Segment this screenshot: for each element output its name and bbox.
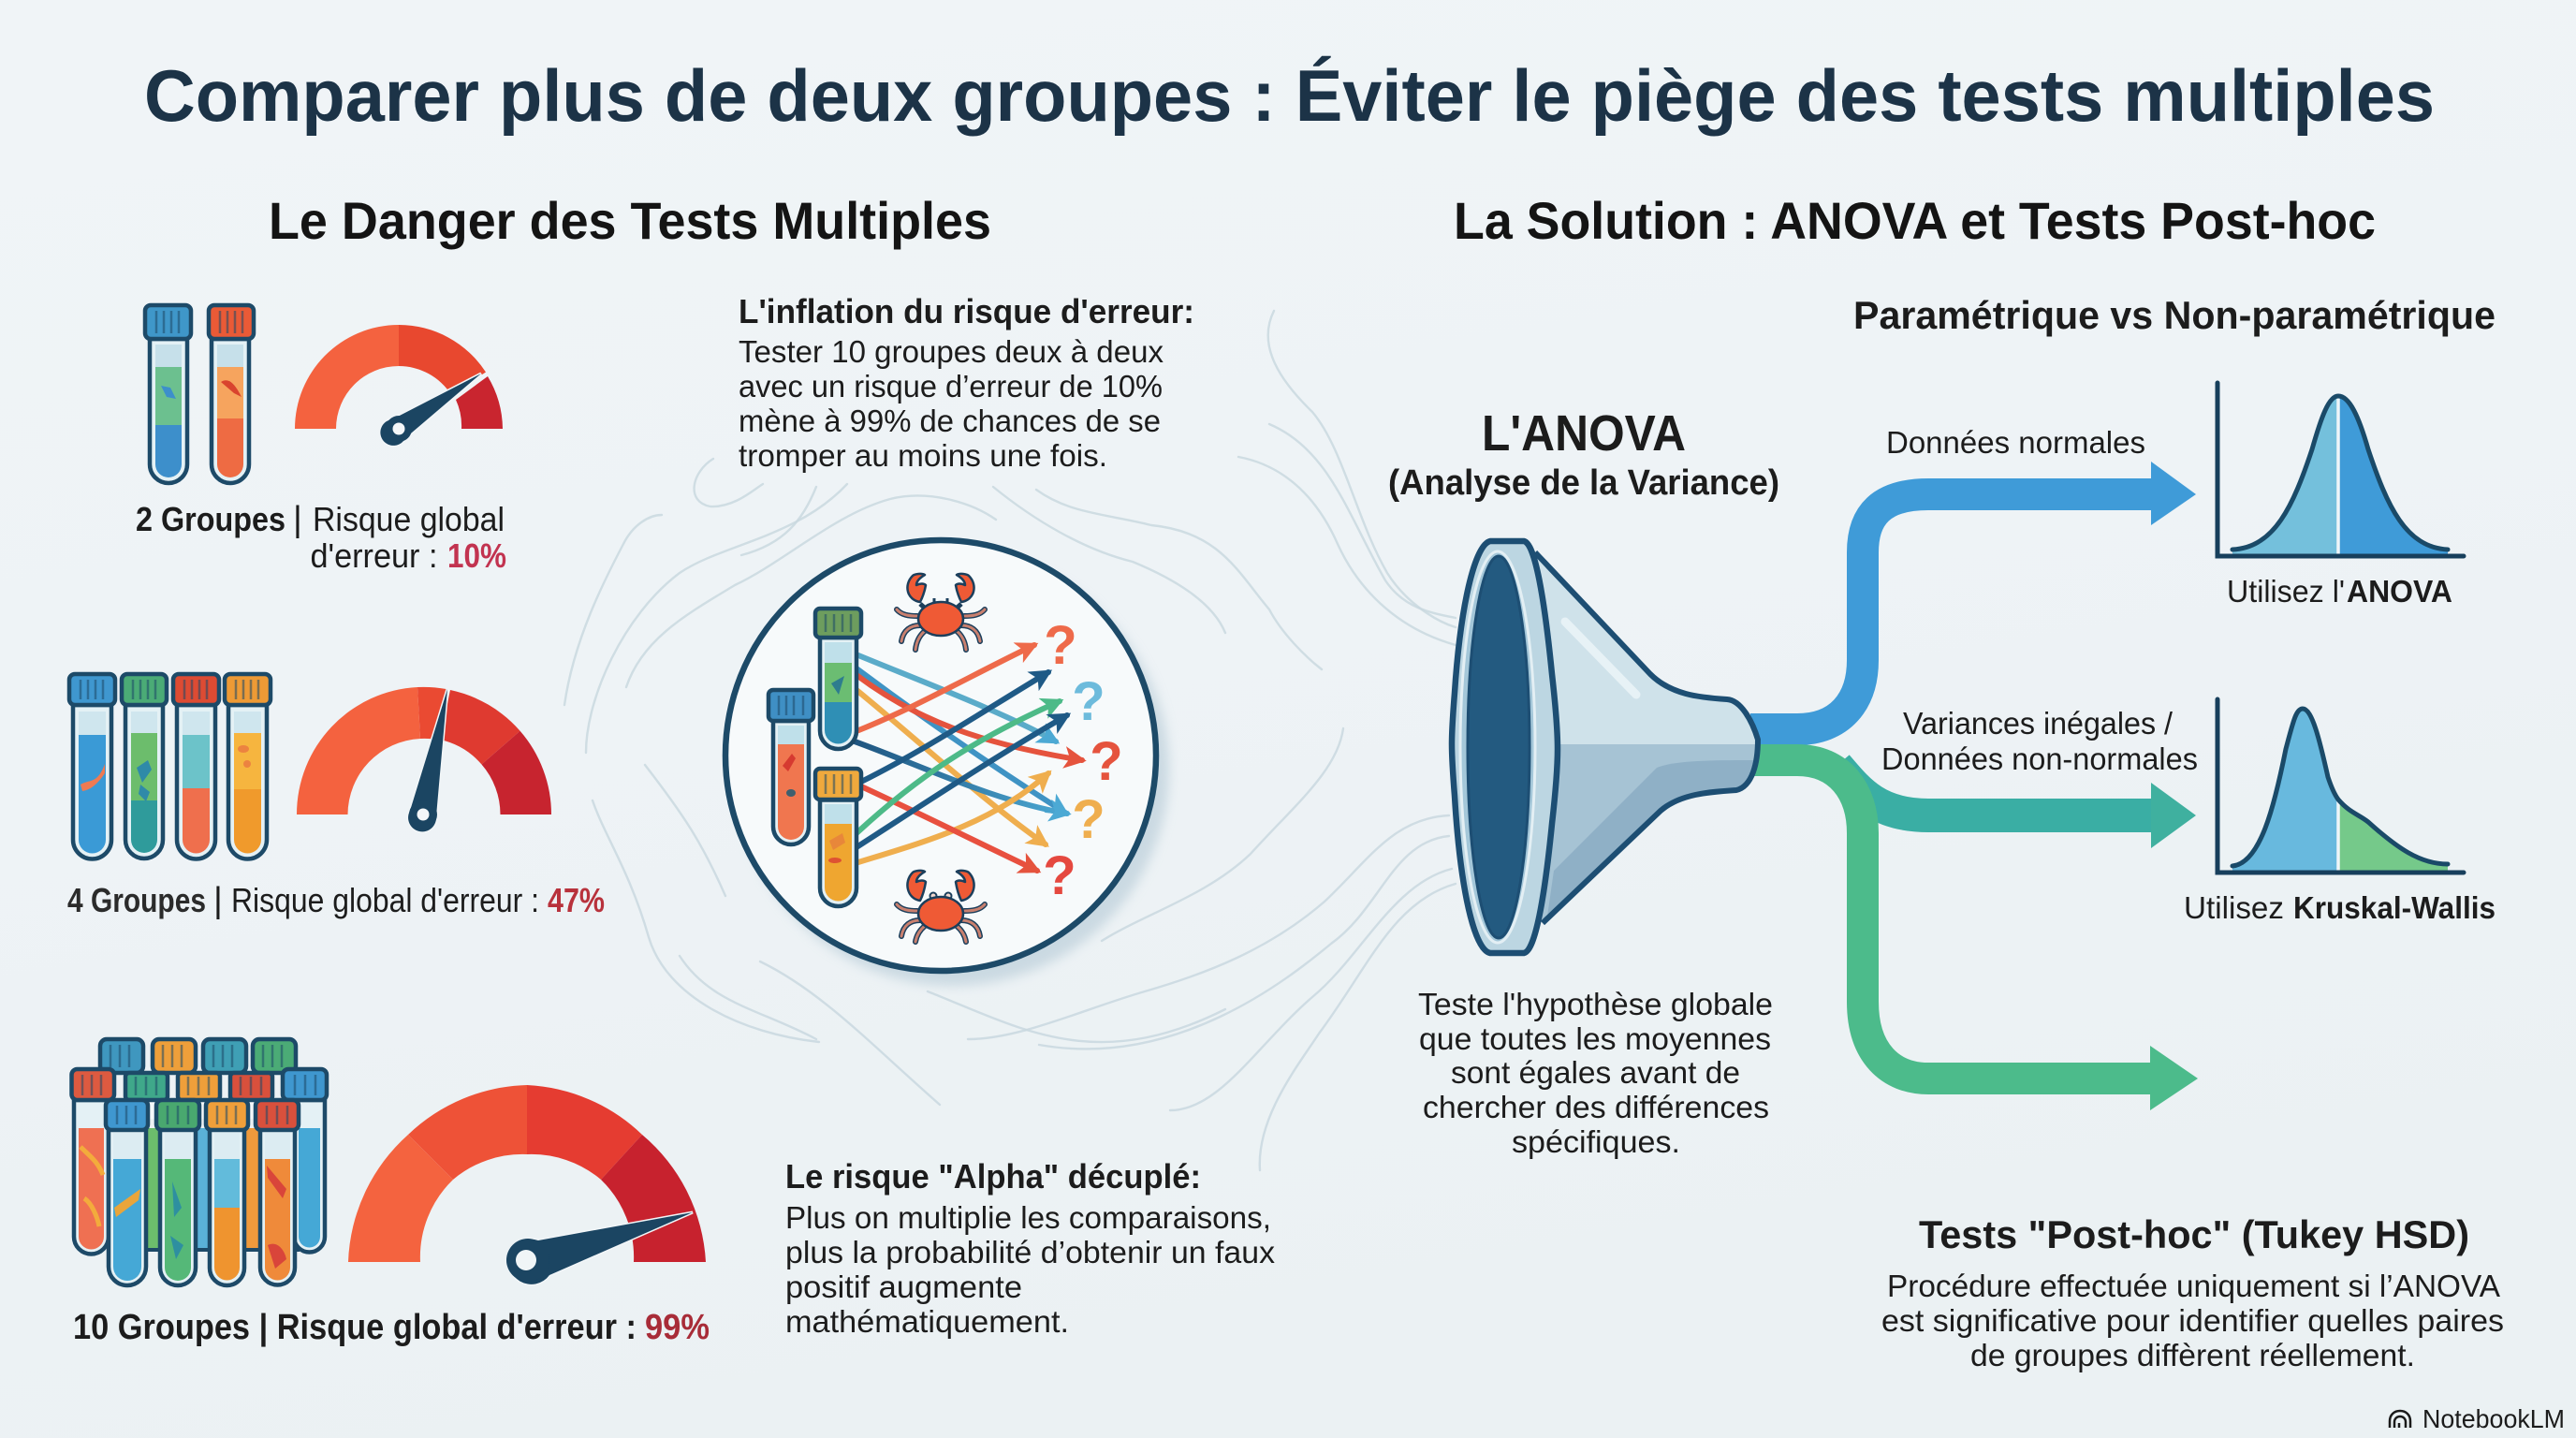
label: 4 groupes xyxy=(67,881,605,920)
heading: solution: La Solution : ANOVA et Tests Post-hoc xyxy=(1454,191,2376,250)
text block: risque alpha xyxy=(785,1157,1275,1339)
label: utilisez ANOVA: ANOVA xyxy=(2347,574,2452,609)
text block: risque alpha: plus la probabilité d’obtenir un faux xyxy=(785,1235,1275,1269)
text block: risque alpha: positif augmente xyxy=(785,1269,1022,1304)
icons: question marks: ? xyxy=(1044,615,1077,676)
icon: funnel xyxy=(1452,541,1769,953)
title: Comparer plus de deux groupes : Éviter le piège des tests multiples xyxy=(144,54,2435,137)
text block: inflation du risque: tromper au moins une fois. xyxy=(739,438,1107,473)
chart: skewed distribution xyxy=(2217,699,2464,873)
heading: ANOVA xyxy=(1388,405,1779,503)
gauge: 47% xyxy=(297,687,551,831)
text block: hypothèse globale: sont égales avant de xyxy=(1451,1055,1740,1090)
label: données normales: Données normales xyxy=(1886,425,2145,460)
text block: inflation du risque: mène à 99% de chances de se xyxy=(739,404,1161,438)
panel: 10 groupes xyxy=(71,1039,710,1347)
circle shadow xyxy=(737,553,1169,986)
label: variances inégales: Variances inégales / xyxy=(1903,706,2174,741)
chart: normal distribution xyxy=(2217,383,2464,556)
swirling background lines xyxy=(564,311,1456,1170)
heading: ANOVA: L'ANOVA xyxy=(1482,405,1686,462)
text block: tests post-hoc xyxy=(1881,1212,2504,1372)
icons: question marks: ? xyxy=(1090,731,1123,792)
text block: tests post-hoc: Procédure effectuée uniquement si l’ANOVA xyxy=(1887,1269,2500,1303)
test tube: blue cap xyxy=(768,690,813,844)
gauge: 99% xyxy=(348,1085,706,1284)
icons: question marks: ? xyxy=(1072,789,1105,850)
gauge: 10% xyxy=(295,325,503,446)
label: 10 groupes: 99% xyxy=(645,1308,710,1347)
text block: risque alpha: Le risque "Alpha" décuplé: xyxy=(785,1157,1201,1196)
label: 4 groupes: | xyxy=(213,881,223,920)
label: variances inégales xyxy=(1881,706,2198,776)
label: 2 groupes: Risque global xyxy=(313,500,505,538)
text block: inflation du risque: Tester 10 groupes deux à deux xyxy=(739,334,1164,369)
label: utilisez ANOVA: Utilisez l' xyxy=(2227,574,2345,609)
text block: inflation du risque: avec un risque d’erreur de 10% xyxy=(739,369,1163,404)
arrows: comparisons xyxy=(855,645,1082,871)
crab: top xyxy=(897,574,985,650)
text block: hypothèse globale: chercher des différences xyxy=(1423,1090,1769,1124)
icons: question marks: ? xyxy=(1043,845,1076,906)
text block: tests post-hoc: est significative pour identifier quelles paires xyxy=(1881,1303,2504,1338)
heading: paramétrique vs non-paramétrique: Paramétrique vs Non-paramétrique xyxy=(1853,293,2496,337)
text block: tests post-hoc: Tests "Post-hoc" (Tukey HSD) xyxy=(1919,1212,2469,1256)
label: utilisez kruskal-wallis: Kruskal-Wallis xyxy=(2293,890,2496,925)
arrow: blue branch xyxy=(1750,462,2196,729)
label: 4 groupes: Risque global d'erreur : xyxy=(231,881,539,919)
text block: inflation du risque xyxy=(739,292,1194,473)
text block: tests post-hoc: de groupes diffèrent réellement. xyxy=(1970,1338,2415,1372)
text block: hypothèse globale: spécifiques. xyxy=(1512,1124,1680,1159)
test tube: green cap xyxy=(815,609,861,749)
crab: bottom xyxy=(897,871,985,942)
label: 2 groupes xyxy=(136,500,506,575)
illustration: pairwise comparison circle xyxy=(725,540,1169,986)
label: 2 groupes: d'erreur : xyxy=(311,536,438,575)
label: 4 groupes: 47% xyxy=(548,881,605,919)
text block: hypothèse globale xyxy=(1418,987,1773,1159)
text block: hypothèse globale: que toutes les moyennes xyxy=(1419,1021,1771,1056)
heading: danger: Le Danger des Tests Multiples xyxy=(269,191,991,250)
label: 2 groupes: 2 Groupes xyxy=(136,500,285,538)
icon: ten test tubes xyxy=(71,1039,327,1285)
panel: 2 groupes xyxy=(136,305,506,575)
label: utilisez kruskal-wallis xyxy=(2184,890,2496,925)
text block: hypothèse globale: Teste l'hypothèse globale xyxy=(1418,987,1773,1021)
text block: inflation du risque: L'inflation du risque d'erreur: xyxy=(739,292,1194,330)
label: 10 groupes: 10 Groupes | Risque global d'erreur : xyxy=(73,1308,637,1347)
label: utilisez ANOVA xyxy=(2227,574,2452,609)
icon: four test tubes xyxy=(69,674,271,858)
label: 2 groupes: | xyxy=(293,500,302,539)
heading: ANOVA: (Analyse de la Variance) xyxy=(1388,463,1779,503)
test tube: orange cap xyxy=(815,769,861,906)
arrow: teal branch xyxy=(1837,766,2196,848)
logo: NotebookLM: NotebookLM xyxy=(2422,1404,2565,1433)
icon: two test tubes xyxy=(145,305,254,483)
icons: question marks: ? xyxy=(1072,671,1105,732)
circle xyxy=(725,540,1156,971)
label: 2 groupes: 10% xyxy=(447,536,506,575)
label: utilisez kruskal-wallis: Utilisez xyxy=(2184,890,2284,925)
label: 4 groupes: 4 Groupes xyxy=(67,881,206,919)
text block: risque alpha: Plus on multiplie les comparaisons, xyxy=(785,1200,1271,1235)
arrow: green branch xyxy=(1750,760,2198,1110)
text block: risque alpha: mathématiquement. xyxy=(785,1304,1069,1339)
label: variances inégales: Données non-normales xyxy=(1881,741,2198,776)
panel: 4 groupes xyxy=(67,674,605,920)
icons: question marks xyxy=(1043,615,1123,906)
